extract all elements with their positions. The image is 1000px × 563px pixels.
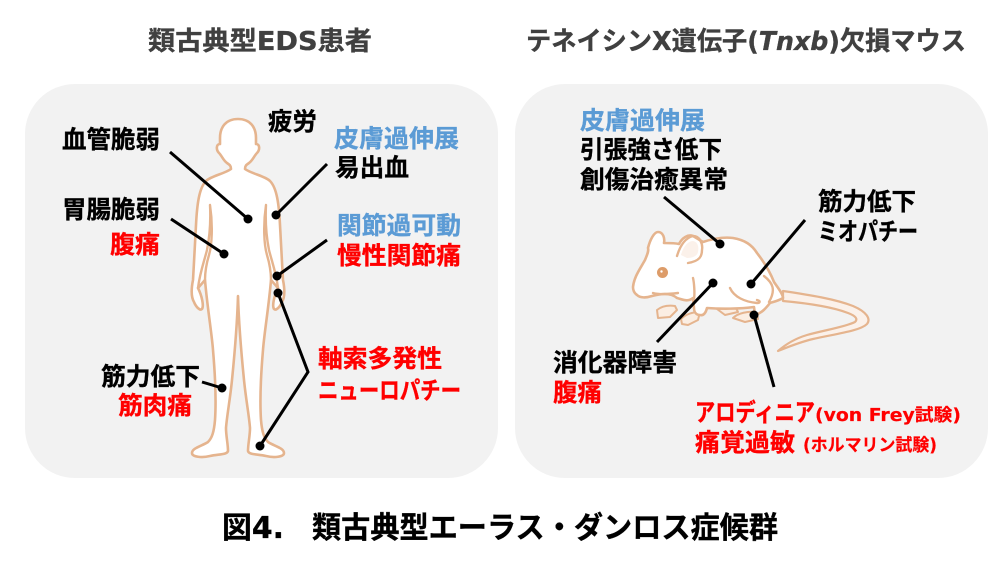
label: abnormal wound healing: 創傷治癒異常 <box>580 165 728 194</box>
pointer: allodynia <box>750 310 774 387</box>
label: reduced tensile strength: 引張強さ低下 <box>580 135 722 164</box>
label: allodynia <box>695 398 961 427</box>
label: muscle weakness: 筋力低下 <box>101 362 200 391</box>
pointer: joint <box>272 240 327 280</box>
label: muscle weakness: 筋力低下 <box>818 187 916 216</box>
label: hyperalgesia: (ホルマリン試験) <box>803 436 937 456</box>
label: abdominal pain: 腹痛 <box>110 230 160 259</box>
label: skin hyperextensibility: 皮膚過伸展 <box>580 106 705 135</box>
label: allodynia: アロディニア <box>695 398 815 427</box>
figure caption: 類古典型エーラス・ダンロス症候群 <box>312 511 778 546</box>
label: hyperalgesia: 痛覚過敏 <box>695 428 796 457</box>
label: axonal polyneuropathy: 軸索多発性 <box>318 344 442 373</box>
label: vascular fragility: 血管脆弱 <box>62 125 160 154</box>
label: gastrointestinal disorder: 消化器障害 <box>553 348 677 377</box>
label: muscle pain: 筋肉痛 <box>118 391 192 420</box>
label: chronic joint pain: 慢性関節痛 <box>337 241 461 270</box>
pointer: skin <box>272 164 327 220</box>
icon: human body outline <box>192 119 284 457</box>
heading: classical EDS patients: 類古典型EDS患者 <box>148 27 372 57</box>
label: gastrointestinal fragility: 胃腸脆弱 <box>62 195 160 224</box>
pointer: muscle <box>202 382 226 392</box>
pointer: gastrointestinal <box>657 278 718 342</box>
panel: patient <box>25 84 498 478</box>
label: neuropathy: ニューロパチー <box>318 376 461 405</box>
panel: mouse <box>515 84 988 478</box>
label: allodynia: (von Frey試験) <box>815 406 961 426</box>
pointer: vascular fragility <box>170 152 252 224</box>
label: myopathy: ミオパチー <box>818 217 918 246</box>
label: skin hyperextensibility: 皮膚過伸展 <box>334 124 459 153</box>
label: fatigue: 疲労 <box>268 107 317 136</box>
label: hyperalgesia <box>695 428 937 457</box>
figure caption: 図4. <box>222 511 284 546</box>
icon: mouse outline <box>633 232 868 351</box>
label: joint hypermobility: 関節過可動 <box>337 211 461 240</box>
pointer: skin <box>664 197 724 248</box>
pointer: neuropathy <box>256 288 308 450</box>
pointer: gastrointestinal <box>171 219 228 258</box>
heading: Tnxb knockout mice: テネイシンX遺伝子(Tnxb)欠損マウス <box>526 27 966 57</box>
label: easy bruising: 易出血 <box>335 153 409 182</box>
label: abdominal pain: 腹痛 <box>553 378 602 407</box>
pointer: muscle <box>746 220 805 288</box>
